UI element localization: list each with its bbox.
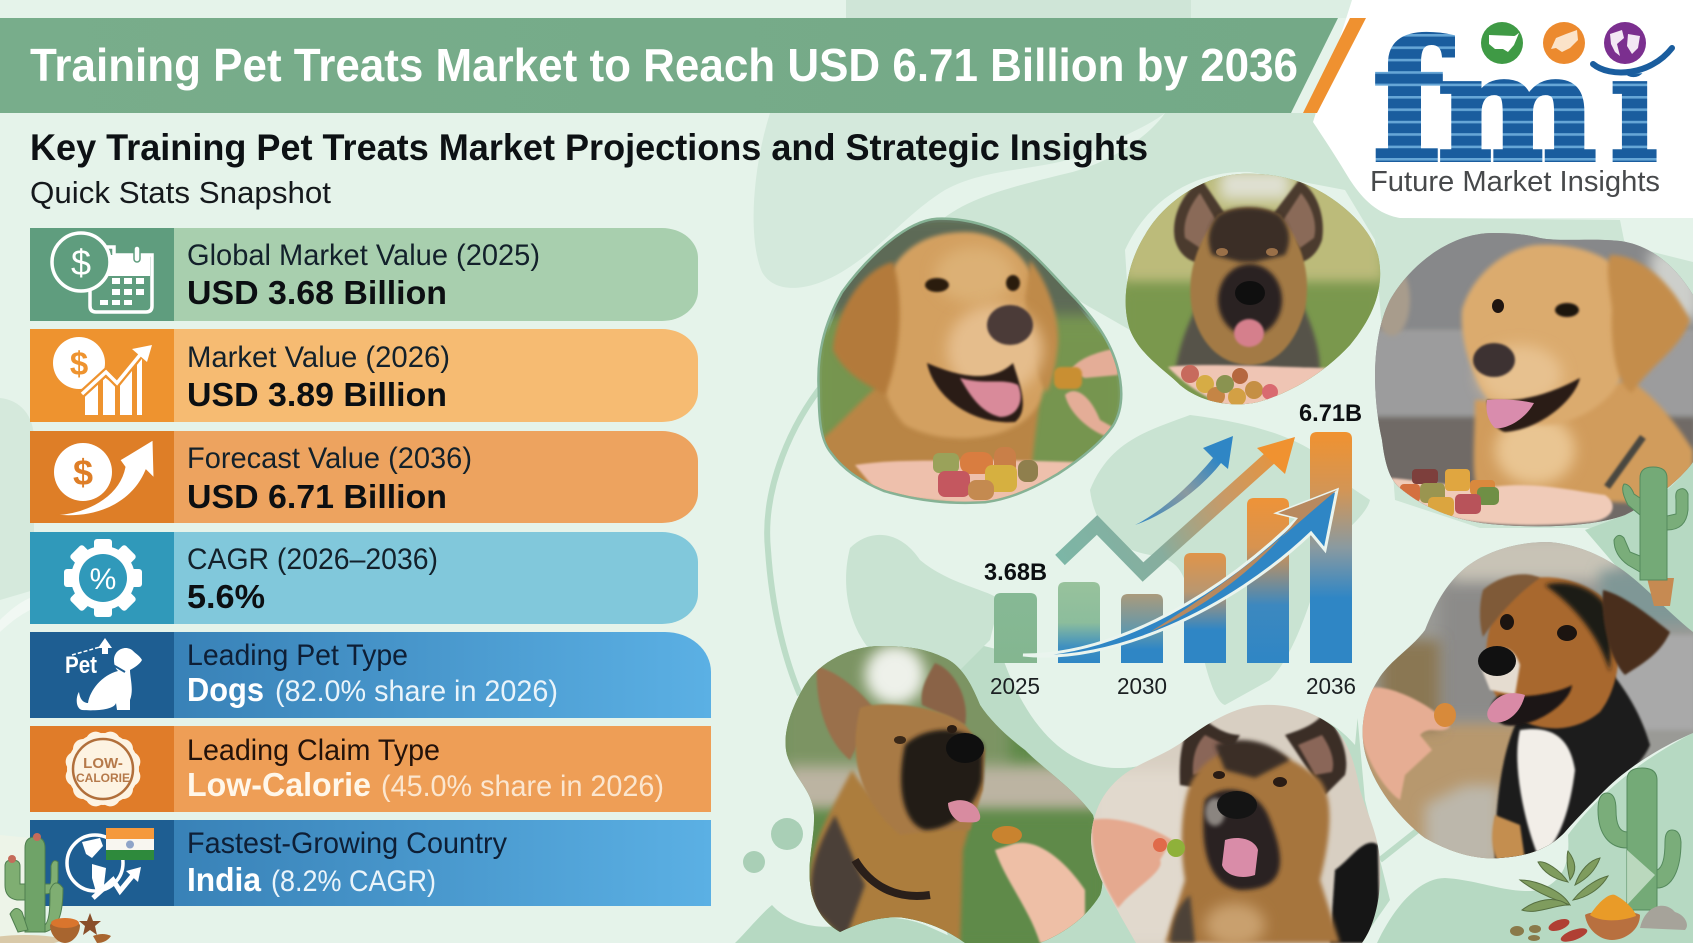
value bbox=[187, 671, 558, 708]
value bbox=[187, 861, 436, 898]
logo name: Future Market Insights bbox=[1370, 166, 1660, 198]
icon: low calorie badge: CALORIE bbox=[76, 771, 130, 785]
photo: german shepherd outdoors bbox=[780, 640, 1105, 943]
value: USD 3.68 Billion bbox=[187, 274, 447, 311]
value bbox=[187, 766, 664, 803]
label: CAGR (2026–2036) bbox=[187, 543, 438, 576]
label: Leading Claim Type bbox=[187, 734, 440, 767]
icon: dog with pet label bbox=[65, 638, 142, 710]
arrow: zigzag bbox=[1060, 437, 1295, 572]
value: India bbox=[187, 861, 262, 898]
card: fastest growing country bbox=[30, 820, 711, 906]
icon: dollar and growth bars bbox=[53, 337, 152, 415]
bar chart: market growth bbox=[984, 400, 1362, 699]
icon: low calorie badge: LOW- bbox=[83, 755, 123, 772]
value: USD 6.71 Billion bbox=[187, 478, 447, 515]
card: leading pet type bbox=[30, 632, 711, 718]
title: Training Pet Treats Market to Reach USD 6.71 Billion by 2036 bbox=[30, 39, 1298, 91]
logo letters: m bbox=[1437, 21, 1597, 195]
icon: gear with percent bbox=[64, 539, 142, 617]
photo: german shepherd indoors bbox=[1090, 705, 1380, 943]
logo letters: f bbox=[1372, 5, 1454, 200]
logo globes bbox=[1481, 22, 1672, 72]
label: Fastest-Growing Country bbox=[187, 827, 507, 860]
axis labels: 2030 bbox=[1117, 673, 1167, 699]
card: cagr bbox=[30, 532, 698, 624]
value: (45.0% share in 2026) bbox=[381, 770, 664, 803]
arrow: main swoosh bbox=[1023, 490, 1337, 656]
photo: german shepherd with treats in palm bbox=[1120, 170, 1385, 410]
logo dot cover bbox=[1604, 30, 1664, 73]
photo: golden retriever with treat bbox=[815, 215, 1125, 505]
axis labels bbox=[990, 673, 1356, 699]
photo: mixed breed dog bbox=[1360, 535, 1693, 870]
value: Low-Calorie bbox=[187, 766, 371, 803]
bars bbox=[994, 432, 1352, 663]
card: global market value bbox=[30, 228, 698, 321]
icon: low calorie badge bbox=[62, 728, 144, 810]
icon: dollar and rising arrow: $ bbox=[73, 452, 93, 493]
value: 5.6% bbox=[187, 578, 265, 615]
icon: globe, india flag and arrow bbox=[67, 828, 154, 898]
quick stats heading: Quick Stats Snapshot bbox=[30, 175, 331, 210]
icon: dollar and calendar bbox=[52, 233, 152, 312]
arrow: small blue bbox=[1135, 436, 1233, 525]
label: Global Market Value (2025) bbox=[187, 239, 540, 272]
photo: golden retriever on sofa bbox=[1370, 230, 1693, 528]
icon: dog with pet label: Pet bbox=[65, 652, 97, 679]
cactus in pot: right bbox=[1614, 467, 1688, 606]
cactus and spices: bottom left bbox=[0, 833, 111, 943]
axis labels: 2025 bbox=[990, 673, 1040, 699]
logo area panel bbox=[1313, 0, 1693, 218]
label: Forecast Value (2036) bbox=[187, 442, 472, 475]
title banner bbox=[0, 18, 1338, 113]
axis labels: 2036 bbox=[1306, 673, 1356, 699]
icon: gear with percent: % bbox=[90, 563, 116, 596]
icon: dollar and calendar: $ bbox=[71, 242, 91, 283]
value: (82.0% share in 2026) bbox=[275, 675, 558, 708]
value: (8.2% CAGR) bbox=[271, 865, 436, 898]
subtitle: Key Training Pet Treats Market Projections and Strategic Insights bbox=[30, 127, 1148, 168]
value: Dogs bbox=[187, 671, 264, 708]
card: market value 2026 bbox=[30, 329, 698, 422]
card: forecast value bbox=[30, 431, 698, 523]
orange slash bbox=[1303, 18, 1366, 113]
logo letters: i bbox=[1610, 21, 1658, 195]
cactus and spices: bottom right bbox=[1510, 768, 1687, 943]
value label 2025: 3.68B bbox=[984, 559, 1047, 586]
card: leading claim type bbox=[30, 726, 711, 812]
label: Market Value (2026) bbox=[187, 341, 450, 374]
value: USD 3.89 Billion bbox=[187, 376, 447, 413]
value label 2036: 6.71B bbox=[1299, 400, 1362, 427]
icon: dollar and rising arrow bbox=[54, 440, 154, 516]
label: Leading Pet Type bbox=[187, 639, 408, 672]
icon: dollar and growth bars: $ bbox=[70, 345, 88, 382]
decorative dots bbox=[743, 818, 803, 873]
